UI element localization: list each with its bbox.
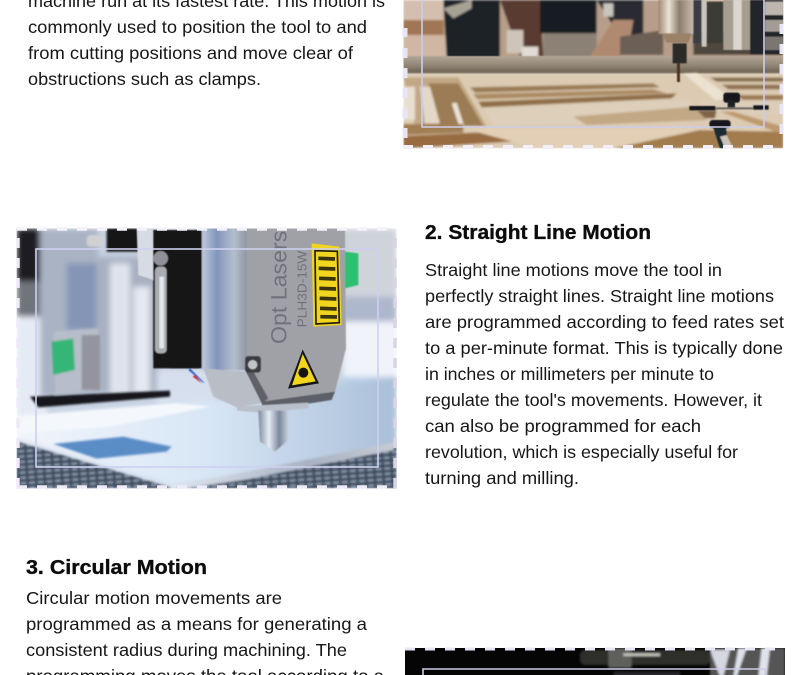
text block: straight line motion description: can also be programmed for each	[425, 416, 701, 436]
laser warning label	[312, 243, 342, 327]
laser hazard triangle icon	[288, 349, 319, 389]
text block: straight line motion description: in inches or millimeters per minute to	[425, 364, 714, 384]
text block: straight line motion description: are programmed according to feed rates set	[425, 312, 784, 332]
photo dashed border	[403, 0, 784, 148]
photo: CNC router cutting wood	[403, 0, 784, 148]
text block: straight line motion description: Straight line motions move the tool in	[425, 260, 722, 280]
text block: straight line motion description: turning and milling.	[425, 468, 579, 488]
photo dashed border	[17, 229, 397, 488]
text block: circular motion description: consistent radius during machining. The	[26, 640, 347, 660]
text block: rapid motion description: from cutting positions and move clear of	[28, 43, 353, 63]
heading: Circular Motion: 3. Circular Motion	[26, 556, 207, 579]
photo inner frame	[423, 669, 765, 675]
text block: rapid motion description: obstructions such as clamps.	[28, 69, 261, 89]
photo: laser head over metal sheet	[17, 228, 397, 488]
text block: straight line motion description: to a per-minute format. This is typically done	[425, 338, 783, 358]
text block: circular motion description	[26, 588, 384, 675]
text block: straight line motion description: revolution, which is especially useful for	[425, 442, 738, 462]
photo inner frame	[36, 249, 378, 467]
photo inner frame	[422, 0, 764, 127]
engraved head lettering	[271, 232, 306, 343]
text block: rapid motion description: commonly used to position the tool to and	[28, 17, 367, 37]
engraved head lettering: Opt Lasers	[267, 231, 292, 344]
engraved head lettering: PLH3D-15W	[295, 250, 310, 327]
heading: Straight Line Motion: 2. Straight Line Motion	[425, 221, 651, 244]
text block: circular motion description: programmed as a means for generating a	[26, 614, 367, 634]
photo dashed border	[405, 648, 785, 650]
text block: straight line motion description: regulate the tool's movements. However, it	[425, 390, 762, 410]
text block: straight line motion description	[425, 260, 784, 488]
text block: rapid motion description	[28, 0, 385, 89]
text block: straight line motion description: perfectly straight lines. Straight line motions	[425, 286, 774, 306]
photo: dark machine close-up	[405, 648, 785, 675]
text block: circular motion description: Circular motion movements are	[26, 588, 282, 608]
